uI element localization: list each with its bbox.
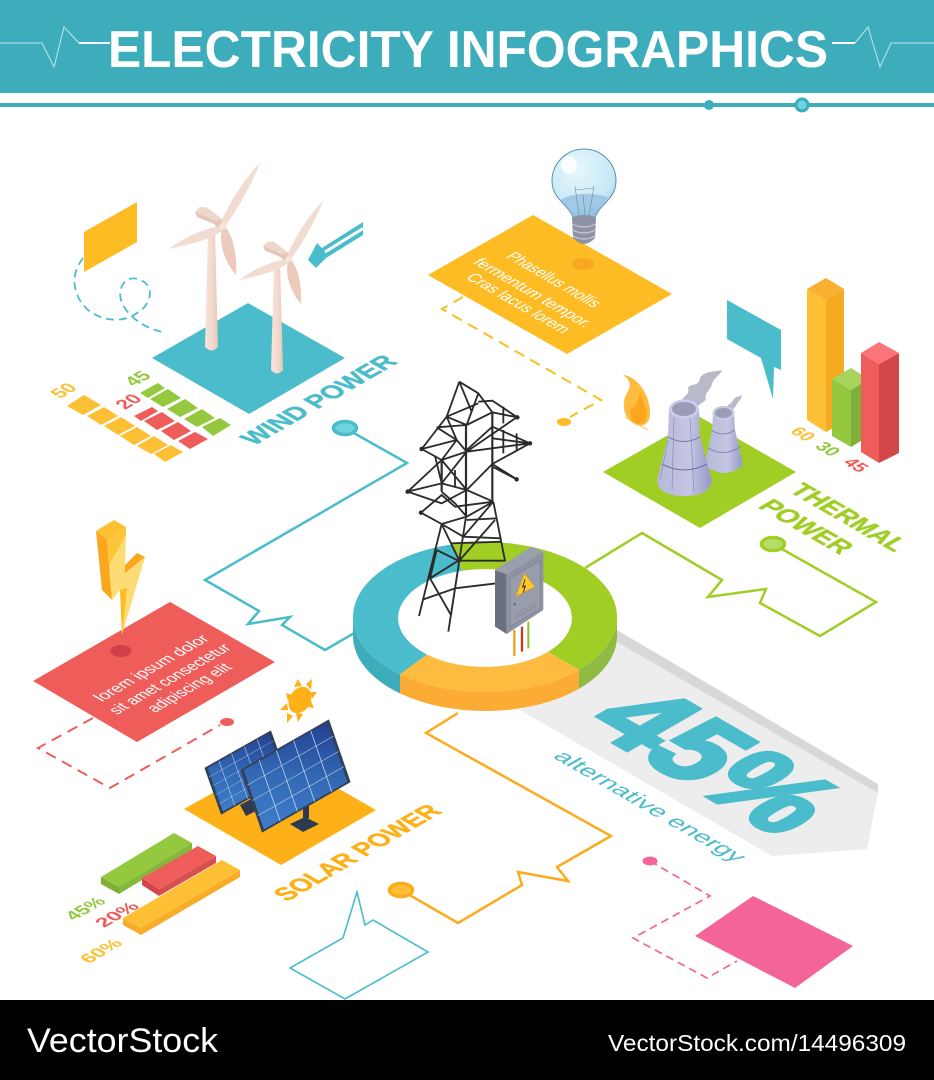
thermal power label: POWER bbox=[752, 495, 861, 558]
label 30: 30 bbox=[811, 439, 845, 459]
note card yellow bbox=[84, 202, 137, 272]
label 45%: 45% bbox=[60, 894, 110, 923]
leader dot bbox=[220, 718, 234, 726]
icon: sun bbox=[280, 679, 317, 723]
turbine two bbox=[239, 201, 323, 374]
panel: bulb note bbox=[428, 149, 672, 426]
smoke large bbox=[680, 370, 722, 410]
solar platform bbox=[184, 755, 376, 865]
cooling tower small bbox=[705, 406, 743, 473]
label 50: 50 bbox=[46, 380, 83, 402]
header banner bbox=[0, 0, 934, 111]
bar chart horizontal bbox=[60, 833, 240, 966]
card text: adipiscing elit bbox=[142, 660, 237, 715]
pink note bbox=[633, 856, 853, 988]
title: ELECTRICITY INFOGRAPHICS bbox=[108, 21, 828, 79]
alternative energy caption: alternative energy bbox=[548, 747, 753, 866]
dashed leader bbox=[633, 861, 737, 978]
panel: solar power bbox=[60, 679, 448, 966]
icon: light bulb bbox=[552, 149, 616, 244]
panel: lightning note bbox=[33, 520, 275, 788]
watermark url: VectorStock.com/14496309 bbox=[608, 1030, 906, 1056]
wind arrow bbox=[308, 222, 363, 268]
pink card bbox=[695, 896, 853, 988]
connector: wind power bbox=[205, 422, 407, 650]
label 45: 45 bbox=[839, 455, 873, 475]
shadow band bbox=[520, 630, 878, 856]
label 60%: 60% bbox=[75, 936, 127, 966]
card text: sit amet consectetur bbox=[104, 641, 236, 717]
thermal power label: THERMAL bbox=[783, 479, 915, 556]
grid chart bbox=[46, 368, 231, 462]
label 60: 60 bbox=[786, 424, 820, 444]
solar panel front bbox=[242, 721, 349, 832]
icon: flame bbox=[623, 375, 650, 430]
panel: thermal power bbox=[603, 278, 915, 558]
label 20: 20 bbox=[111, 391, 148, 413]
leader dot bbox=[557, 418, 571, 426]
big percentage 45%: 45% bbox=[559, 670, 873, 851]
label 20%: 20% bbox=[90, 899, 144, 930]
connector: solar power bbox=[390, 713, 611, 923]
card dot bbox=[572, 258, 594, 270]
thermal platform bbox=[603, 417, 796, 528]
outline speech bubble bbox=[290, 892, 428, 999]
wind platform bbox=[152, 303, 345, 414]
connector: thermal power bbox=[585, 533, 876, 636]
icon: electric meter box bbox=[495, 547, 543, 656]
card text: lorem ipsum dolor bbox=[89, 632, 214, 704]
wind power label: WIND POWER bbox=[233, 350, 404, 449]
card dot bbox=[110, 645, 132, 657]
dashed leader bbox=[38, 718, 220, 788]
dashed loop bbox=[74, 258, 162, 332]
icon: pylon bbox=[406, 382, 531, 632]
smoke small bbox=[724, 395, 742, 414]
watermark bar bbox=[0, 1000, 934, 1080]
bar chart bbox=[786, 278, 899, 475]
solar panel back bbox=[206, 732, 286, 816]
yellow card bbox=[428, 215, 672, 354]
label 45: 45 bbox=[120, 368, 157, 390]
donut chart bbox=[353, 542, 617, 711]
teal speech bubble bbox=[727, 300, 781, 399]
watermark logo: VectorStock bbox=[27, 1022, 219, 1060]
leader dot bbox=[642, 856, 658, 866]
solar power label: SOLAR POWER bbox=[266, 800, 448, 905]
panel: wind power bbox=[46, 163, 404, 462]
red card bbox=[33, 602, 275, 742]
cooling tower large bbox=[657, 400, 712, 496]
card text: Phasellus mollis bbox=[502, 249, 606, 310]
turbine one bbox=[169, 163, 260, 350]
dashed leader bbox=[442, 297, 601, 417]
icon: lightning bolt bbox=[96, 520, 145, 635]
card text: Cras lacus lorem bbox=[462, 270, 575, 336]
card text: fermentum tempor. bbox=[469, 255, 598, 330]
